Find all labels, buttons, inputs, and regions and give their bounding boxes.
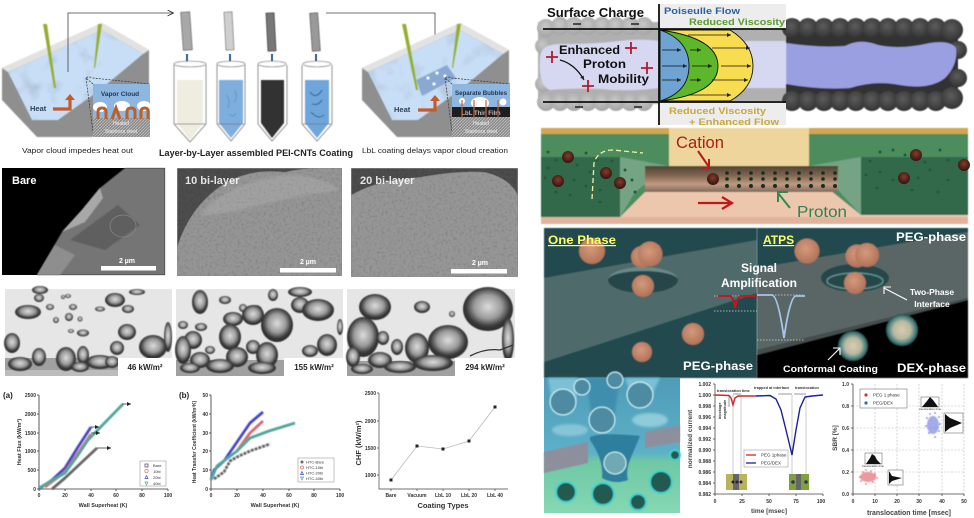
chart: SBR vs translocation time: 0.2 [842, 470, 849, 476]
chart (a): heat flux: 0 [38, 493, 41, 499]
legend b: HTC-10bi [306, 465, 323, 470]
minus charges [573, 24, 642, 107]
panel: layer-by-layer tubes [159, 12, 353, 158]
legend: PEG 1phase [761, 452, 787, 458]
panel: heat tray with vapor cloud [2, 23, 151, 155]
chart: CHF vs coating types: 2000 [365, 419, 376, 425]
legend: PEG 1 phase [873, 392, 900, 398]
chart: normalized current: 1.002 [698, 382, 711, 388]
histogram insets: red: translocation time [862, 464, 884, 468]
dashed path [592, 150, 643, 199]
chart: CHF vs coating types: CHF (kW/m²) [354, 420, 363, 466]
panel: one phase vs ATPS [544, 228, 968, 378]
panel: bubbles 46 kW/m2: 46 kW/m² [127, 363, 163, 372]
chart (b): heat transfer coefficient: 20 [234, 493, 240, 499]
chart (b): heat transfer coefficient: 40 [260, 493, 266, 499]
chart: normalized current: 0.988 [698, 459, 711, 465]
arrow: tray to tubes [68, 13, 173, 72]
micrograph insets [726, 474, 809, 490]
channel walls [543, 4, 786, 125]
guide lines [733, 395, 806, 474]
signal amplification label: Amplification [721, 276, 797, 290]
chart (b): heat transfer coefficient: 10 [202, 468, 208, 474]
chart (b): heat transfer coefficient: 60 [286, 493, 292, 499]
tube 4: blue with CNT [302, 61, 332, 141]
legend [744, 450, 788, 467]
chart (a): heat flux: (a) [3, 391, 13, 400]
one phase heading: One Phase [548, 233, 616, 247]
two-phase interface callout: Two-Phase [910, 287, 954, 297]
probes [402, 24, 461, 90]
caption: LbL coating delays vapor cloud creation [362, 148, 508, 155]
panel: bubbles 294 kW/m2 [346, 287, 515, 376]
heat label and arrow: Heat [30, 104, 47, 113]
chart: normalized current: 0.986 [698, 470, 711, 476]
chart: normalized current: 1.000 [698, 393, 711, 399]
cation label: Cation [676, 133, 724, 152]
ATPS heading: ATPS [763, 233, 794, 247]
chart: normalized current: normalized current [687, 409, 694, 468]
flow labels: Poiseulle Flow [664, 6, 741, 17]
chart: normalized current: 50 [766, 499, 772, 505]
ATPS scene [757, 228, 968, 378]
chart (a): heat flux: 20 [62, 493, 68, 499]
legend a: 20bi [153, 475, 161, 480]
chart: normalized current [687, 382, 825, 515]
cation arrow [698, 151, 709, 168]
signal amplification label: Signal [741, 261, 777, 275]
chart (b): heat transfer coefficient: 100 [336, 493, 344, 499]
chart (b): heat transfer coefficient: Wall Superheat (K) [251, 503, 300, 509]
proton arrow [778, 192, 790, 208]
chart: CHF vs coating types: Bare [385, 493, 397, 499]
chart: SBR vs translocation time: 0 [852, 499, 855, 505]
caption: Vapor cloud impedes heat out [22, 148, 133, 155]
panel: coated tray with separate bubbles [362, 23, 510, 155]
legend b: HTC-Bare [306, 460, 325, 464]
chart: SBR vs translocation time: 1.0 [842, 382, 849, 388]
chart: normalized current: 25 [739, 499, 745, 505]
panel: SEM 10 bi-layer: 10 bi-layer [185, 175, 240, 187]
inset: vapor cloud: Vapor Cloud [101, 91, 139, 98]
two-phase interface callout: Interface [914, 299, 950, 309]
legend a: 10bi [153, 469, 161, 474]
chart: SBR vs translocation time [832, 382, 967, 517]
chart (b): heat transfer coefficient: 30 [202, 431, 208, 437]
flow labels: Reduced Viscosity [689, 17, 786, 28]
chart (b): heat transfer coefficient: 0 [205, 487, 208, 493]
chart: normalized current: 0.996 [698, 415, 711, 421]
legend: PEG/DEX [873, 400, 893, 406]
panel: bubbles 294 kW/m2: 294 kW/m² [465, 363, 505, 372]
panel: SEM 20 bi-layer [351, 168, 518, 277]
chart (a): heat flux [3, 391, 172, 509]
chart (a): heat flux: Wall Superheat (K) [79, 503, 128, 509]
chart: normalized current: 75 [793, 499, 799, 505]
tube 3: black [258, 61, 287, 141]
chart: CHF vs coating types: 2500 [365, 391, 376, 397]
flow profiles [660, 30, 753, 101]
chart: normalized current: 0.984 [698, 481, 711, 487]
flow arrow [698, 197, 732, 209]
red cloud [859, 469, 878, 485]
data series b [211, 412, 295, 480]
chart: SBR vs translocation time: 20 [894, 499, 900, 505]
conformal coating callout [783, 348, 878, 374]
chart (a): heat flux: 40 [88, 493, 94, 499]
tray body [362, 23, 509, 137]
dipped slides [181, 12, 320, 51]
trace annotations: translocation [795, 386, 820, 390]
legend b: HTC-40bi [306, 476, 323, 481]
probes [43, 24, 102, 88]
panel: SEM bare: Bare [12, 175, 36, 187]
chart (b): heat transfer coefficient: 50 [202, 393, 208, 399]
chart: SBR vs translocation time: 50 [961, 499, 967, 505]
chart (b): heat transfer coefficient: 40 [202, 412, 208, 418]
histogram insets: blue: translocation time [919, 407, 941, 411]
inset: vapor cloud: Heated [113, 121, 129, 127]
chart: SBR vs translocation time: 10 [872, 499, 878, 505]
legend [860, 389, 907, 408]
chart: SBR vs translocation time: 0.0 [842, 492, 849, 498]
flow labels [664, 6, 786, 128]
two-phase interface callout [884, 287, 954, 309]
legend a: Bare [153, 463, 162, 468]
current traces [715, 395, 756, 405]
chart: normalized current: 100 [817, 499, 825, 505]
enhanced proton mobility label: Proton [583, 59, 626, 71]
inset: LbL thin film [445, 77, 510, 137]
chart: normalized current: 0.994 [698, 426, 711, 432]
chart (a): heat flux: 100 [164, 493, 172, 499]
enhanced proton mobility label: Enhanced [559, 45, 620, 57]
trace annotations: magnitude [723, 400, 727, 419]
flow labels: Reduced Viscosity [669, 106, 767, 117]
lower coated particles [556, 450, 680, 510]
top pores [550, 372, 653, 433]
chart: normalized current: 0.998 [698, 404, 711, 410]
panel: surface charge nanochannel [535, 4, 967, 128]
heat label and arrow: Heat [394, 105, 411, 114]
chart (a): heat flux: 1000 [25, 449, 36, 455]
blue cloud [925, 412, 941, 438]
curved arrow [560, 60, 584, 80]
chart: normalized current: time [msec] [751, 508, 787, 515]
chart (b): heat transfer coefficient: (b) [179, 391, 190, 400]
tube 2: blue [217, 61, 245, 141]
chart (a): heat flux: 2500 [25, 393, 36, 399]
inset: vapor cloud: Stainless steel [105, 129, 137, 135]
chart: SBR vs translocation time: SBR [%] [832, 425, 839, 451]
double arrows [187, 54, 316, 65]
chart (b): heat transfer coefficient: 80 [311, 493, 317, 499]
proton label: Proton [797, 204, 847, 221]
flow labels: + Enhanced Flow [689, 117, 780, 128]
trace annotations: trapped at interface [754, 386, 789, 390]
protons in channel [725, 171, 837, 188]
data series a [39, 404, 123, 489]
chart (a): heat flux: 1500 [25, 431, 36, 437]
surface charge heading: Surface Charge [547, 5, 644, 20]
panel: bubbles 155 kW/m2 [175, 287, 343, 376]
panel: SEM bare [2, 168, 165, 275]
coating heading: Layer-by-Layer assembled PEI-CNTs Coating [159, 148, 353, 158]
chart (b): heat transfer coefficient: Heat Transfer Coefficient (kW/m²K) [192, 400, 198, 483]
chart (b): heat transfer coefficient: 0 [210, 493, 213, 499]
enhanced proton mobility label: Mobility [598, 74, 650, 86]
signal traces [714, 295, 805, 340]
arrow: tubes to coated tray [326, 13, 435, 72]
chart: CHF vs coating types: LbL 20 [461, 493, 477, 499]
chart (a): heat flux: 2000 [25, 412, 36, 418]
right dark beads and channel [782, 18, 967, 111]
trace annotations: translocation time [717, 389, 750, 393]
heat label and arrow [394, 95, 440, 114]
panel: SEM bare: 2 µm [119, 258, 135, 265]
limit arrows a [91, 404, 131, 448]
enhanced proton mobility label [559, 45, 650, 86]
panel: SEM 10 bi-layer [177, 168, 342, 276]
chart: SBR vs translocation time: 0.4 [842, 448, 849, 454]
chart: CHF vs coating types [354, 391, 508, 510]
chart: SBR vs translocation time: 0.8 [842, 404, 849, 410]
trace annotations [717, 386, 820, 419]
tray body [2, 23, 149, 137]
chart: SBR vs translocation time: 40 [939, 499, 945, 505]
legend b [298, 458, 334, 482]
chart: normalized current: 0.990 [698, 448, 711, 454]
legend: PEG/DEX [761, 460, 781, 466]
chart (a): heat flux: 80 [139, 493, 145, 499]
chart (a): heat flux: 0 [33, 487, 36, 493]
inset: vapor cloud [86, 77, 151, 137]
inset: LbL thin film: LbL Thin Film [461, 111, 501, 117]
chart: SBR vs translocation time: translocation time [msec] [867, 510, 951, 517]
panel: bubbles 46 kW/m2 [4, 286, 172, 376]
chart: CHF vs coating types: Vacuum [407, 493, 427, 499]
protons in reservoirs [544, 148, 950, 204]
chart (b): heat transfer coefficient: 20 [202, 449, 208, 455]
pore shafts and streaks [548, 378, 668, 436]
PEG-phase labels: PEG-phase [896, 230, 966, 244]
cations [552, 149, 970, 189]
centre header blocks [660, 4, 786, 29]
chart: CHF vs coating types: LbL 10 [435, 493, 451, 499]
chart: CHF vs coating types: 1500 [365, 446, 376, 452]
chart (a): heat flux: 60 [113, 493, 119, 499]
tube 1: cream [174, 61, 206, 142]
plus charges [546, 42, 653, 92]
panel: cation and proton channel [541, 128, 970, 224]
chart: normalized current: 0.992 [698, 437, 711, 443]
chart (b): heat transfer coefficient [179, 391, 344, 509]
DEX-phase label: DEX-phase [897, 361, 966, 375]
chart: SBR vs translocation time: 0.6 [842, 426, 849, 432]
plates and funnel [544, 425, 680, 482]
inset: LbL thin film: Heated [473, 121, 489, 127]
inset: LbL thin film: Stainless steel [465, 129, 497, 135]
PEG-phase labels [683, 230, 966, 373]
signal amplification label [721, 261, 797, 290]
legend a: 40bi [153, 481, 161, 486]
panel: SEM 20 bi-layer: 2 µm [472, 260, 488, 267]
panel: bubbles 155 kW/m2: 155 kW/m² [294, 363, 334, 372]
chart: CHF vs coating types: 1000 [365, 473, 376, 479]
panel: 3D illustration of coated particles in pore [544, 372, 680, 513]
trace annotations: blockage [718, 403, 722, 419]
legend b: HTC-20bi [306, 470, 323, 476]
inset: LbL thin film: Separate Bubbles [455, 91, 508, 97]
heat label and arrow [30, 94, 75, 113]
chart: CHF vs coating types: LbL 40 [487, 493, 503, 499]
PEG-phase labels: PEG-phase [683, 359, 753, 373]
conformal coating callout: Conformal Coating [783, 364, 878, 374]
chart (a): heat flux: 500 [28, 468, 36, 474]
panel: SEM 20 bi-layer: 20 bi-layer [360, 175, 415, 187]
chart: normalized current: 0 [714, 499, 717, 505]
left beads and channel [535, 17, 786, 111]
chart: normalized current: 0.982 [698, 492, 711, 498]
chart: CHF vs coating types: Coating Types [417, 501, 469, 510]
one phase scene [544, 228, 757, 378]
chart: SBR vs translocation time: 30 [916, 499, 922, 505]
chart (a): heat flux: Heat Flux (kW/m²) [16, 419, 23, 465]
legend a [140, 461, 166, 486]
panel: SEM 10 bi-layer: 2 µm [300, 259, 316, 266]
